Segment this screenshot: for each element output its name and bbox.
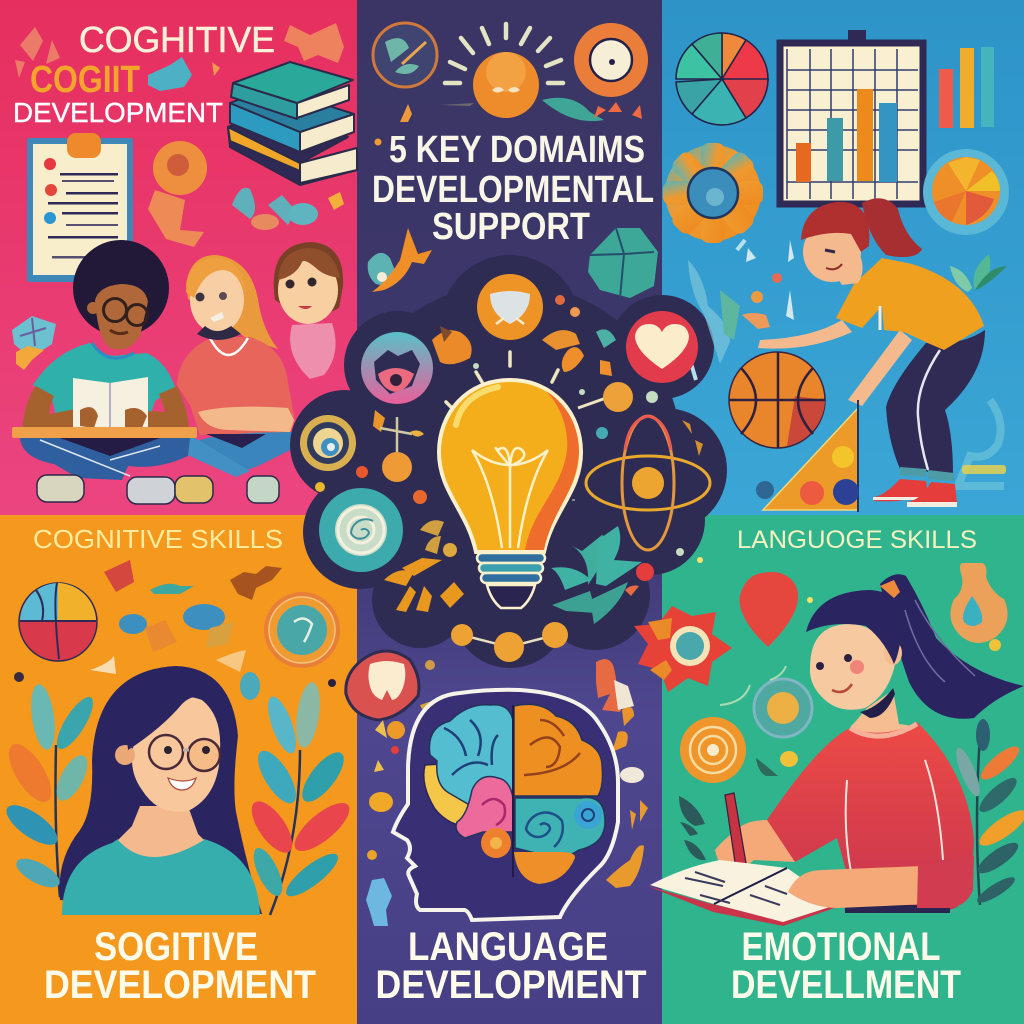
panel: bottom-right green background xyxy=(662,515,1024,1024)
panel: bottom-left large label: DEVELOPMENT xyxy=(44,963,316,1007)
panel: centre column background xyxy=(357,0,663,1024)
chart: bar chart on grid xyxy=(780,30,923,204)
icon: pie chart xyxy=(676,33,768,125)
panel: bottom-centre large label: LANGUAGE xyxy=(408,925,608,969)
icon: clipboard checklist xyxy=(27,133,133,282)
figure: student with afro reading xyxy=(12,240,279,504)
title: cognitive development heading: DEVELOPMENT xyxy=(13,97,223,128)
figure: woman with glasses xyxy=(59,666,262,915)
bottom-right decorative icons xyxy=(634,557,1008,860)
icon: flower badge xyxy=(634,606,732,692)
icon: open notebook xyxy=(647,860,840,926)
panel: top-centre heading: DEVELOPMENTAL xyxy=(372,169,654,211)
icon: target ball xyxy=(264,592,340,668)
panel: top-left pink background xyxy=(0,0,358,516)
icon: ring circle xyxy=(754,679,812,737)
icon: gear xyxy=(663,143,763,243)
icon: round orange pie badge xyxy=(923,149,1009,235)
icon: orange bird xyxy=(368,228,432,292)
icon: teal polyhedron xyxy=(588,228,658,298)
icon: tooth in red rounded shape xyxy=(346,651,419,720)
panel: top-centre heading: SUPPORT xyxy=(432,206,590,248)
icon: pink and teal face circle xyxy=(361,332,433,404)
icon: light bulb xyxy=(439,380,581,608)
title: cognitive development heading: COGHITIVE xyxy=(79,19,275,60)
icon: pen xyxy=(725,793,746,875)
panel: bottom-right large label: DEVELLMENT xyxy=(731,963,961,1007)
icon: basketball xyxy=(729,352,825,448)
panel: top-centre heading xyxy=(372,129,654,248)
icon: teal leaves xyxy=(551,526,654,624)
icon: connected dots chain xyxy=(451,622,568,662)
panel: bottom-centre large label: DEVELOPMENT xyxy=(376,963,646,1007)
figure: student in coral shirt with long blonde hair xyxy=(176,255,302,477)
panel: bottom-right large label xyxy=(731,925,961,1007)
icon: right side leaves xyxy=(952,719,1024,907)
figure: woman in orange shirt with ponytail xyxy=(758,198,985,507)
panel: bottom-centre large label xyxy=(376,925,646,1007)
icon: left laurel branch xyxy=(1,683,99,897)
title: cognitive development heading: COGIIT xyxy=(30,59,140,101)
icon: teal spiral circle xyxy=(319,488,403,572)
figure: girl with ponytail writing xyxy=(715,574,1024,913)
icon: atom xyxy=(586,416,710,550)
icon: orange target circle xyxy=(574,23,648,97)
central confetti xyxy=(315,295,703,612)
icon: heart circle xyxy=(626,311,698,383)
icon: triangle ramp with balls xyxy=(756,400,859,512)
icon: cross branch with orange ball xyxy=(380,417,424,482)
chart: vertical coloured bars xyxy=(939,47,994,128)
shoes xyxy=(37,475,279,504)
icon: right laurel branch xyxy=(244,681,356,915)
purple panel confetti xyxy=(366,659,648,926)
blue panel decorations xyxy=(688,240,1007,486)
panel: bottom-left title: COGNITIVE SKILLS xyxy=(33,524,283,554)
top-left decorative shapes xyxy=(12,23,344,370)
icon: shell in orange circle xyxy=(477,274,543,340)
panel: bottom-right title: LANGUOGE SKILLS xyxy=(737,526,977,554)
panel: top-right blue background xyxy=(662,0,1024,516)
icon: orange ball with pointer xyxy=(578,382,633,412)
icon: small concentric badge xyxy=(300,415,356,471)
icon: segmented sphere xyxy=(19,583,97,661)
panel: bottom-left orange background xyxy=(0,515,357,1024)
panel: bottom-right large label: EMOTIONAL xyxy=(742,925,940,969)
icon: bottle drop xyxy=(950,563,1008,643)
top-centre decorations xyxy=(368,98,658,298)
icon: orange spiral xyxy=(680,717,746,783)
icon: head profile with colourful brain xyxy=(393,690,618,920)
icon: stack of books xyxy=(228,62,357,185)
panel: central dark cloud xyxy=(290,255,727,668)
icon: compass circle xyxy=(373,23,437,87)
figure: writing-side hand and sleeve xyxy=(788,856,974,908)
title: cognitive development heading xyxy=(13,19,275,128)
bulb screw base xyxy=(477,553,545,608)
panel: top-centre heading: 5 KEY DOMAIMS xyxy=(389,129,645,171)
bottom-left decorative icons xyxy=(14,560,340,700)
panel: bottom-left large label: SOGITIVE xyxy=(94,925,258,969)
figure: third student face xyxy=(274,242,343,379)
icon: heart xyxy=(740,572,798,647)
panel: bottom-left large label xyxy=(44,925,316,1007)
icon: sun with rays xyxy=(445,24,563,118)
